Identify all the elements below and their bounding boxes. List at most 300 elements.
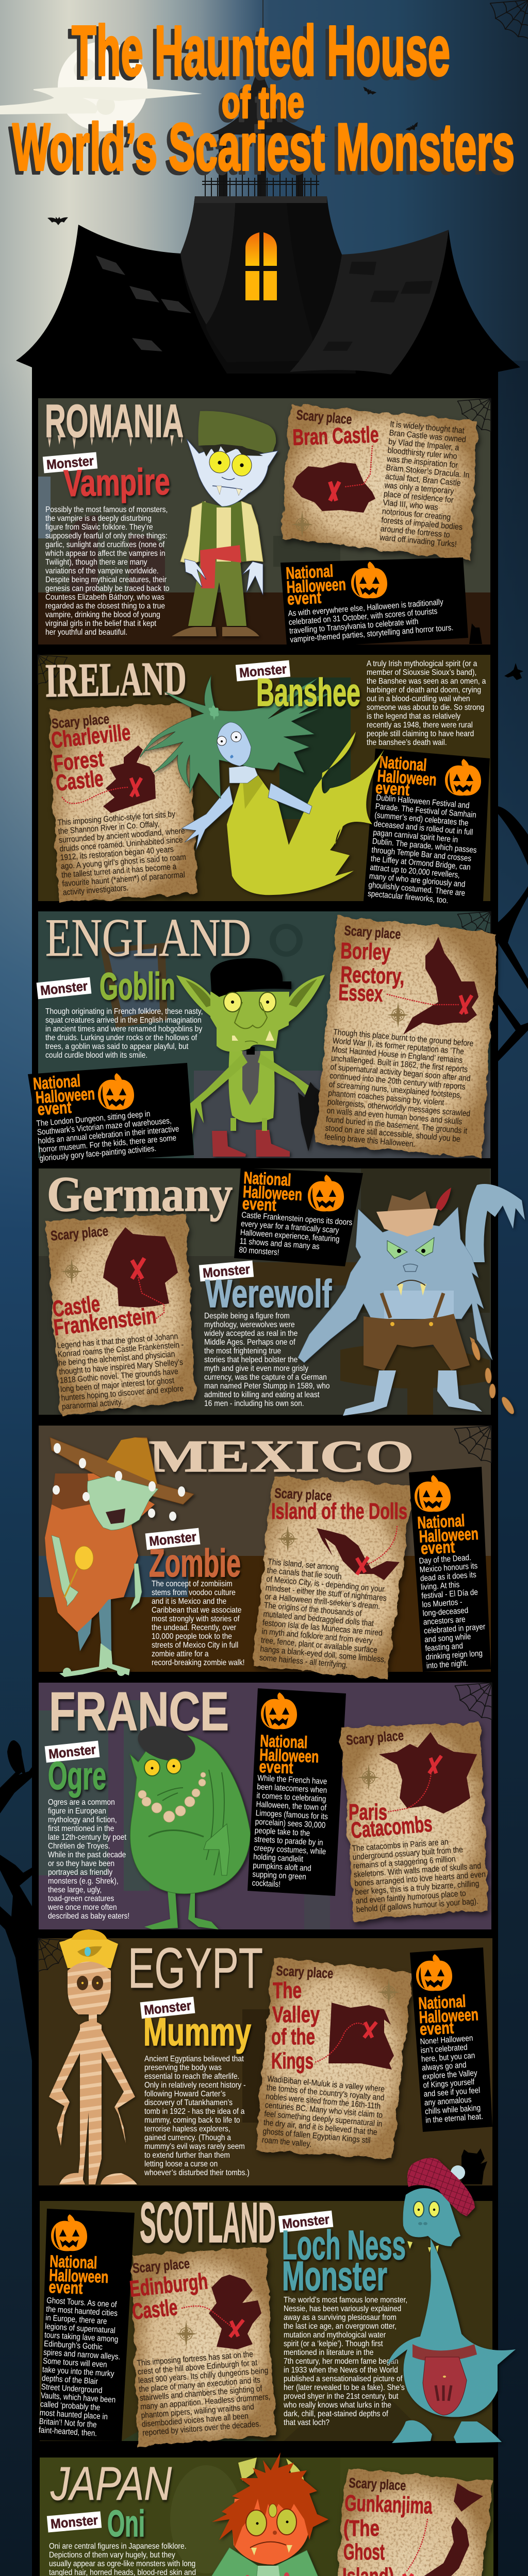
place name: The Valley of the Kings: The <box>273 1978 302 2003</box>
text: Island of the Dolls description: mutilated and bedraggled dolls that <box>263 1609 374 1629</box>
monster name: Vampire: Vampire <box>63 461 170 504</box>
text: vampire description: garlic, sunlight and crucifixes (none of <box>45 540 165 549</box>
monster name: Oni: Oni <box>107 2503 145 2545</box>
panel: France <box>39 1681 492 1929</box>
text: Paris Catacombs description: The catacombs in Paris are an <box>352 1837 449 1853</box>
character: zombie <box>45 1437 194 1677</box>
text: zombie description: stems from voodoo culture <box>152 1588 236 1597</box>
map marker route <box>315 2023 367 2062</box>
heading: scary place: Scary place <box>345 1727 404 1748</box>
text: Loch Ness description: mentioned in literature in the <box>284 2348 373 2357</box>
heading: national Halloween event: National <box>243 1168 291 1190</box>
parchment: Gunkanjima <box>328 2468 493 2576</box>
heading: national Halloween event: event <box>419 2018 454 2039</box>
text: Bran Castle description: Bran Castle was owned <box>389 428 466 445</box>
text: Mexico Halloween: ancestors are <box>423 1615 466 1627</box>
text: mummy description: gained currency. (Though a <box>144 2133 232 2142</box>
panel: Germany <box>39 1166 525 1416</box>
text: Edinburgh description: reported by visitors over the decades. <box>142 2419 261 2438</box>
heading: national Halloween event <box>48 2251 109 2298</box>
panel: national Halloween event, France <box>248 1688 346 1896</box>
text: banshee description: the Banshee was seen as an omen, a <box>367 676 486 686</box>
text: Valley of the Kings description: nobles were sited from the 16th-11th <box>266 2092 381 2111</box>
text: Edinburgh description: phantom pipers, wailing wraiths and <box>141 2402 254 2420</box>
panel: Romania <box>38 396 491 645</box>
text: Edinburgh description: crest of the hill above Edinburgh for at <box>137 2358 258 2377</box>
icon: pumpkin <box>98 1073 134 1110</box>
text: Frankenstein description: 1818 Gothic novel. The grounds have <box>59 1367 178 1385</box>
text: vampire description: regarded as the closest thing to a true <box>45 601 165 611</box>
place name: Island of the Dolls: Island of the Dolls <box>271 1499 407 1524</box>
heading: national Halloween event: event <box>259 1757 293 1777</box>
text: mummy description: Only in relatively recent history - <box>144 2080 246 2090</box>
country heading: Romania: ROMANIA <box>45 396 184 447</box>
text: Bran Castle description: actual fact, Bran Castle <box>385 472 461 488</box>
text: England Halloween: The London Dungeon, sitting deep in <box>36 1110 151 1128</box>
map cross <box>131 778 141 796</box>
heading: national Halloween event <box>417 1510 480 1558</box>
text: Ireland Halloween: (summer’s end) celebrates the <box>374 811 469 828</box>
text: Valley of the Kings description: the dry air, and it is believed that the <box>263 2118 377 2137</box>
map: Japan <box>407 2483 483 2576</box>
text: banshee description: A truly Irish mythological spirit (or a <box>367 659 477 668</box>
panel: Ireland <box>38 652 490 907</box>
heading: national Halloween event: National <box>379 752 427 774</box>
text: Edinburgh description: the place of many an execution and its <box>139 2375 260 2394</box>
text: vampire description: her youthful and beautiful. <box>45 628 127 637</box>
text: Egypt Halloween: None! Halloween <box>420 2034 473 2046</box>
text: werewolf description: man named Peter Stumpp in 1589, who <box>204 1381 330 1391</box>
monster name: Goblin: Goblin <box>100 965 175 1008</box>
place name: Edinburgh Castle <box>128 2268 209 2325</box>
text: Scotland Halloween: legions of supernatural <box>45 2322 116 2335</box>
place name: Castle Frankenstein: Frankenstein <box>52 1303 158 1341</box>
place name: Borley Rectory, Essex: Rectory, <box>340 962 405 989</box>
parchment: Edinburgh Castle <box>128 2247 276 2446</box>
text: Loch Ness description: proved shyer in the 21st century, but <box>284 2392 399 2401</box>
heading: national Halloween event: Halloween <box>419 1524 479 1546</box>
text: Egypt Halloween: of Kings yourself <box>423 2078 475 2090</box>
text: Borley description: of screaming nuns, unexplained footsteps, <box>328 1080 463 1100</box>
map cross <box>364 2022 376 2038</box>
text: Borley description: World War II, its former reputation as ‘The <box>332 1036 465 1057</box>
text: Scotland Halloween: faint-hearted, then. <box>38 2426 97 2438</box>
text: Mexico Halloween: Day of the Dead. <box>419 1553 471 1566</box>
panel: England <box>28 907 498 1164</box>
text: goblin description: squat creatures arrived in the English imagination <box>45 1015 202 1025</box>
monster label: Monster <box>50 2512 98 2532</box>
compass rose <box>292 512 312 537</box>
text: zombie description: zombie attire for a <box>152 1649 209 1658</box>
text: ogre description: were once more often <box>47 1903 117 1912</box>
text: Borley description: of supernatural activity began soon after and <box>330 1062 471 1083</box>
text: mummy description: Ancient Egyptians believed that <box>144 2054 244 2063</box>
text: Bran Castle description: was only a temporary <box>384 481 454 496</box>
text: Mexico Halloween: feasting and <box>425 1642 464 1653</box>
text: Romania Halloween: As with everywhere else, Halloween is traditionally <box>288 598 444 618</box>
text: Germany Halloween: 11 shows and as many as <box>239 1237 320 1251</box>
text: Scotland Halloween: the most haunted cities <box>46 2305 118 2318</box>
panel: Japan <box>39 2452 493 2576</box>
monster name: Mummy: Mummy <box>143 2010 251 2054</box>
title <box>12 11 515 184</box>
monster label: Monster <box>48 1741 96 1762</box>
monster name: Werewolf: Werewolf <box>205 1272 332 1316</box>
text: goblin description: Though originating in French folklore, these nasty, <box>45 1007 203 1016</box>
text: Scotland Halloween: Vaults, which have been <box>40 2392 116 2405</box>
map cross <box>429 1756 441 1773</box>
text: France Halloween: supping on green <box>252 1870 306 1882</box>
place name: The Valley of the Kings <box>271 1978 320 2074</box>
icon: pumpkin <box>351 562 387 598</box>
text: Island of the Dolls description: The origins of the thousands of <box>263 1601 362 1619</box>
map: Romania <box>292 462 375 513</box>
text: Scotland Halloween: Ghost Tours. As one of <box>46 2296 118 2310</box>
text: England Halloween: horror museum. For the kids, there are some <box>38 1134 177 1155</box>
bats flying round the house <box>47 86 421 225</box>
heading: national Halloween event: event <box>37 1097 72 1119</box>
text: vampire description: which appear to affect the vampires in <box>45 549 166 558</box>
text: Island of the Dolls description: tree, fence, plant or available surface <box>260 1636 378 1655</box>
text: Scotland Halloween: in Europe, there are <box>45 2314 107 2326</box>
heading: national Halloween event: Halloween <box>242 1182 303 1204</box>
text: France Halloween: Limoges (famous for its <box>255 1809 328 1822</box>
text: oni description: Depictions of them vary hugely, but they <box>49 2550 175 2560</box>
text: Paris Catacombs description: remains of a staggering 6 million <box>353 1854 456 1871</box>
map: Germany <box>103 1227 178 1308</box>
heading: national Halloween event <box>418 1991 480 2039</box>
heading: national Halloween event <box>375 752 438 801</box>
text: mummy description: whoever’s disturbed their tombs.) <box>144 2168 250 2177</box>
text: Frankenstein description: Legend has it that the ghost of Johann <box>57 1332 178 1350</box>
text: Charleville description: druids once roamed. Uninhabited since <box>59 835 183 854</box>
parchment: Paris Catacombs <box>340 1722 488 1921</box>
text: Valley of the Kings description: feel something deeply supernatural in <box>264 2109 383 2129</box>
place name: Bran Castle: Bran Castle <box>292 422 379 450</box>
text: Scotland Halloween: take you into the murky <box>42 2365 115 2379</box>
text: Germany Halloween: Halloween experience, featuring <box>240 1228 340 1244</box>
text: England Halloween: Southwark’s Victorian maze of warehouses, <box>37 1116 172 1137</box>
text: Bran Castle description: by Vlad the Impaler, a <box>388 437 460 453</box>
panel: national Halloween event, Germany <box>234 1168 363 1266</box>
text: Frankenstein description: long been of major interest for ghost <box>60 1376 175 1394</box>
compass rose <box>358 1765 379 1790</box>
text: Scotland Halloween: tours taking lave among <box>44 2331 119 2344</box>
text: Ireland Halloween: many of who are gloriously and <box>369 872 466 889</box>
text: Egypt Halloween: and see if you feel <box>423 2086 481 2099</box>
text: Ireland Halloween: spectacular fireworks, too. <box>367 889 449 905</box>
text: Egypt Halloween: isn’t celebrated <box>420 2043 468 2055</box>
monster label: Monster <box>40 978 88 998</box>
panel: national Halloween event, Mexico <box>409 1467 491 1672</box>
text: Island of the Dolls description: in myth and folklore and from every <box>261 1627 373 1646</box>
panel: Scotland <box>38 2158 516 2446</box>
heading: national Halloween event: Halloween <box>286 574 346 597</box>
place name: Borley Rectory, Essex: Borley <box>340 938 391 965</box>
map marker route <box>406 2519 427 2572</box>
compass rose <box>277 1527 298 1551</box>
text: France Halloween: streets to parade by in <box>254 1835 323 1848</box>
text: Loch Ness description: who really knows what lurks in the <box>283 2400 391 2410</box>
full moon <box>58 42 147 131</box>
heading: national Halloween event: event <box>242 1194 277 1214</box>
heading: national Halloween event: National <box>260 1731 308 1752</box>
text: ogre description: these large, ugly, <box>48 1885 102 1894</box>
text: zombie description: streets of Mexico City in full <box>152 1640 238 1650</box>
text: Ireland Halloween: deceased and is rolled out in full <box>373 820 473 837</box>
text: Charleville description: the tallest turret and it has become a <box>61 862 177 880</box>
country heading: Ireland: IRELAND <box>45 652 187 707</box>
text: mummy description: tomb in 1922 - has the idea of a <box>144 2107 245 2116</box>
text: Scotland Halloween: depths of the Blair <box>42 2374 98 2386</box>
place name: Borley Rectory, Essex: Essex <box>338 980 384 1007</box>
text: Borley description: phantom coaches passing by, violent <box>328 1089 445 1108</box>
text: Scotland Halloween: spires and narrow alleys. <box>43 2348 121 2362</box>
map: Scotland <box>209 2275 261 2349</box>
monster name: Zombie: Zombie <box>149 1541 241 1585</box>
place name: Borley Rectory, Essex <box>338 938 405 1007</box>
text: Paris Catacombs description: bones arranged into love hearts and even <box>354 1870 486 1888</box>
heading: national Halloween event <box>285 561 347 608</box>
text: Island of the Dolls description: This island, set among <box>268 1557 339 1572</box>
map: Ireland <box>103 745 156 813</box>
text: Valley of the Kings description: roam the valley. <box>261 2136 312 2149</box>
heading: scary place: Scary place <box>274 1485 332 1504</box>
compass rose <box>61 1259 82 1284</box>
text: Paris Catacombs description: and even faintly humorous place to <box>355 1889 466 1906</box>
text: Germany Halloween: Castle Frankenstein opens its doors <box>241 1211 353 1227</box>
panel: national Halloween event, England <box>28 1063 194 1164</box>
heading: national Halloween event: Halloween <box>35 1084 95 1107</box>
map: Egypt <box>328 2003 394 2070</box>
heading: national Halloween event: event <box>375 778 410 799</box>
text: werewolf description: mythology, werewolves were <box>204 1320 295 1329</box>
heading: scary place: Scary place <box>132 2256 190 2276</box>
text: Borley description: continued into the 20th century with reports <box>329 1071 466 1092</box>
text: Valley of the Kings description: WadiBiban el-Muluk is a valley where <box>267 2074 385 2094</box>
text: Loch Ness description: 7th century, her modern fame began <box>284 2357 399 2366</box>
text: Borley description: found buried in the basement. The grounds it <box>325 1115 468 1136</box>
text: France Halloween: creepy costumes, while <box>254 1844 326 1856</box>
text: Loch Ness description: her (later revealed to be a fake). She’s <box>284 2383 405 2392</box>
text: Scotland Halloween: Street Underground <box>41 2383 103 2395</box>
character: ogre <box>130 1720 251 1929</box>
monster label: Monster <box>143 1997 192 2018</box>
text: Mexico Halloween: into the night. <box>426 1659 468 1671</box>
place name: Gunkanjima (The Ghost Island) <box>342 2490 433 2576</box>
text: ogre description: Ogres are a common <box>48 1798 115 1807</box>
text: banshee description: the banshee’s death wail. <box>367 738 447 747</box>
parchment: Borley Rectory <box>315 916 498 1158</box>
country heading: England: ENGLAND <box>45 907 251 968</box>
text: Bran Castle description: was the inspiration for <box>386 454 458 470</box>
text: Frankenstein description: he being the alchemist and physician <box>58 1349 175 1368</box>
compass rose <box>378 1980 399 2005</box>
text: Mexico Halloween: and song while <box>424 1632 471 1645</box>
map cross <box>330 482 339 501</box>
text: Mexico Halloween: dead as it does its <box>420 1570 476 1583</box>
text: Frankenstein description: Konrad roams the Castle Frankenstein - <box>57 1340 184 1359</box>
text: Borley description: Though this place burnt to the ground before <box>333 1027 474 1048</box>
text: Loch Ness description: Nessie, has been variously explained <box>284 2304 401 2313</box>
text: werewolf description: admitted to killing and eating at least <box>204 1390 320 1399</box>
icon: pumpkin <box>416 1954 452 1991</box>
text: goblin description: the druids. Lurking under rocks or the hollows of <box>45 1033 197 1042</box>
icon: pumpkin <box>261 1692 297 1729</box>
text: Edinburgh description: This imposing fortress has sat on the <box>137 2349 253 2368</box>
text: Romania Halloween: travelling to Transylvania to celebrate with <box>289 617 419 636</box>
country heading: Romania <box>45 396 184 450</box>
map marker route <box>387 1774 431 1812</box>
text: werewolf description: Middle Ages. Perhaps one of <box>204 1337 295 1347</box>
text: Ireland Halloween: Dublin. The parade, which passes <box>372 837 477 855</box>
heading: scary place: Scary place <box>51 711 110 732</box>
heading: national Halloween event: event <box>420 1537 455 1558</box>
heading: national Halloween event: National <box>417 1511 465 1532</box>
text: banshee description: is the legend that as relatively <box>367 711 461 721</box>
monster name: Ogre: Ogre <box>48 1754 106 1798</box>
icon: pumpkin <box>415 1475 451 1512</box>
character: Loch Ness monster <box>387 2158 516 2443</box>
text: Ireland Halloween: Dublin Halloween Festival and <box>376 793 470 810</box>
map cross <box>404 2574 412 2576</box>
witch silhouette on broomstick <box>504 663 523 680</box>
panel: Mexico <box>39 1426 491 1680</box>
text: Charleville description: surrounded by ancient woodland, where <box>59 826 185 845</box>
heading: scary place: Scary place <box>349 2475 406 2494</box>
text: banshee description: harbinger of death and doom, crying <box>367 685 481 694</box>
map: France <box>379 1732 477 1814</box>
text: Bran Castle description: Bram Stoker’s Dracula. In <box>386 463 470 480</box>
character: vampire <box>172 411 278 636</box>
text: werewolf description: currency, was the capture of a German <box>204 1372 327 1382</box>
text: Bran Castle description: It is widely thought that <box>390 419 465 435</box>
text: goblin description: could curdle blood with its smile. <box>45 1050 147 1060</box>
text: Scotland Halloween: Edinburgh’s Gothic <box>44 2340 103 2352</box>
text: werewolf description: myth and give it even more grisly <box>204 1364 309 1373</box>
icon: pumpkin <box>308 1175 344 1211</box>
text: France Halloween: pumpkins aloft and <box>253 1861 311 1873</box>
text: Loch Ness description: the last ice age, an overgrown otter, <box>284 2321 397 2331</box>
heading: national Halloween event <box>32 1070 96 1119</box>
text: Charleville description: activity investigators. <box>62 883 129 897</box>
text: Loch Ness description: spirit (or a ‘kelpie’). Though first <box>284 2339 383 2348</box>
text: werewolf description: the most frightening true <box>204 1346 281 1355</box>
text: Paris Catacombs description: beer kegs, this is a truly bizarre, chilling <box>355 1879 480 1897</box>
map marker route <box>182 2306 234 2329</box>
text: mummy description: mummy, coming back to life to <box>144 2115 240 2125</box>
text: England Halloween: holds an annual celebration in their interactive <box>38 1125 179 1146</box>
text: Mexico Halloween: drinking reign long <box>425 1649 483 1662</box>
text: France Halloween: While the French have <box>257 1774 327 1786</box>
text: werewolf description: widely accepted as real in the <box>204 1329 298 1338</box>
text: Borley description: Most Haunted House in England’ remains <box>332 1045 463 1065</box>
text: werewolf description: 16 men - including his own son. <box>204 1399 304 1408</box>
text: vampire description: figure from Slavic folklore. They’re <box>45 522 153 532</box>
text: Mexico Halloween: celebrated in prayer <box>424 1622 486 1636</box>
text: mummy description: letting loose a curse on <box>144 2159 218 2168</box>
country heading: Egypt: EGYPT <box>128 1937 263 2000</box>
place name: The Valley of the Kings: of the <box>271 2024 315 2049</box>
panel: national Halloween event, Egypt <box>410 1947 492 2132</box>
text: werewolf description: Despite being a figure from <box>204 1311 290 1320</box>
text: Island of the Dolls description: some hairless - all terrifying. <box>259 1653 348 1670</box>
text: Romania Halloween: vampire-themed parties, storytelling and horror tours. <box>290 623 454 645</box>
text: Mexico Halloween: Mexico honours its <box>419 1562 478 1574</box>
heading: scary place: Scary place <box>276 1963 334 1981</box>
parchment: Bran Castle <box>280 404 478 561</box>
lit tower window <box>245 232 277 300</box>
text: Ireland Halloween: pagan carnival spirit here in <box>373 828 458 844</box>
text: zombie description: most strongly with stories of <box>152 1614 240 1623</box>
text: Loch Ness description: dark, chill, peat-stained depths of <box>284 2409 389 2418</box>
character: goblin <box>176 958 325 1157</box>
text: Bran Castle description: around the fortress to <box>380 524 450 540</box>
text: Frankenstein description: thought to have inspired Mary Shelley’s <box>59 1358 184 1377</box>
map marker route <box>387 994 459 1005</box>
text: England Halloween: gloriously gory face-painting activities. <box>39 1144 157 1163</box>
text: Edinburgh description: stairwells and chambers the sighting of <box>139 2384 263 2403</box>
text: oni description: usually appear as ogre-like monsters with long <box>49 2559 195 2568</box>
compass rose <box>176 2321 196 2346</box>
monster name: Loch Ness Monster: Loch Ness <box>282 2222 406 2268</box>
text: Bran Castle description: bloodthirsty ruler who <box>387 446 457 461</box>
left side tree with perched bird <box>0 1740 32 2061</box>
text: vampire description: genesis can probably be traced back to <box>45 584 169 593</box>
black cat silhouette <box>461 2148 487 2184</box>
monster label: Monster <box>282 2211 330 2232</box>
text: Mexico Halloween: living. At this <box>421 1581 460 1592</box>
text: mummy description: discovery of Tutankhamen’s <box>144 2098 233 2107</box>
text: Loch Ness description: in 1933 when the News of the World <box>284 2365 398 2375</box>
heading: national Halloween event: National <box>32 1071 81 1093</box>
place name: Charleville Forest Castle: Castle <box>55 766 105 796</box>
country heading: Mexico: MEXICO <box>148 1432 414 1482</box>
monster name: Banshee: Banshee <box>256 671 360 715</box>
place name: The Valley of the Kings: Kings <box>271 2048 314 2074</box>
text: Ireland Halloween: the Liffey at Ormond Bridge, can <box>370 855 471 872</box>
text: Ireland Halloween: attract up to 20,000 revellers, <box>370 863 460 880</box>
text: Loch Ness description: mutation and mythological water <box>284 2330 386 2340</box>
text: Egypt Halloween: explore the Valley <box>422 2069 478 2081</box>
text: Egypt Halloween: always go and <box>422 2061 467 2073</box>
text: ogre description: or so they have been <box>48 1859 114 1868</box>
heading: scary place: Scary place <box>50 1223 109 1244</box>
text: Bran Castle description: place of residence for <box>383 489 454 505</box>
monster name: Loch Ness Monster: Monster <box>282 2253 387 2299</box>
monster name: Loch Ness Monster <box>282 2222 406 2299</box>
text: France Halloween: it comes to celebrating <box>256 1791 326 1804</box>
map marker route <box>367 1527 397 1565</box>
compass rose <box>388 1003 408 1027</box>
text: mummy description: mummy’s evil ways rarely seem <box>144 2142 245 2151</box>
heading: scary place: Scary place <box>295 407 353 427</box>
text: Egypt Halloween: in the eternal heat. <box>425 2112 484 2125</box>
text: Bran Castle description: forests of impaled bodies <box>381 516 463 532</box>
heading: national Halloween event: event <box>48 2277 83 2297</box>
map cross <box>460 995 472 1014</box>
text: Ireland Halloween: ghoulishly costumed. There are <box>368 880 466 898</box>
text: Mexico Halloween: festival - El Día de <box>421 1588 478 1601</box>
heading: national Halloween event: Halloween <box>419 2005 479 2027</box>
text: Egypt Halloween: any anomalous <box>424 2095 472 2108</box>
parchment: Island of the Dolls <box>253 1476 412 1680</box>
text: Paris Catacombs description: underground ossuary built from the <box>352 1845 463 1862</box>
text: France Halloween: been latecomers when <box>257 1783 327 1795</box>
text: mummy description: preserving the body was <box>144 2063 222 2072</box>
character: oni <box>204 2452 328 2576</box>
text: zombie description: The concept of zombiisim <box>152 1579 233 1588</box>
